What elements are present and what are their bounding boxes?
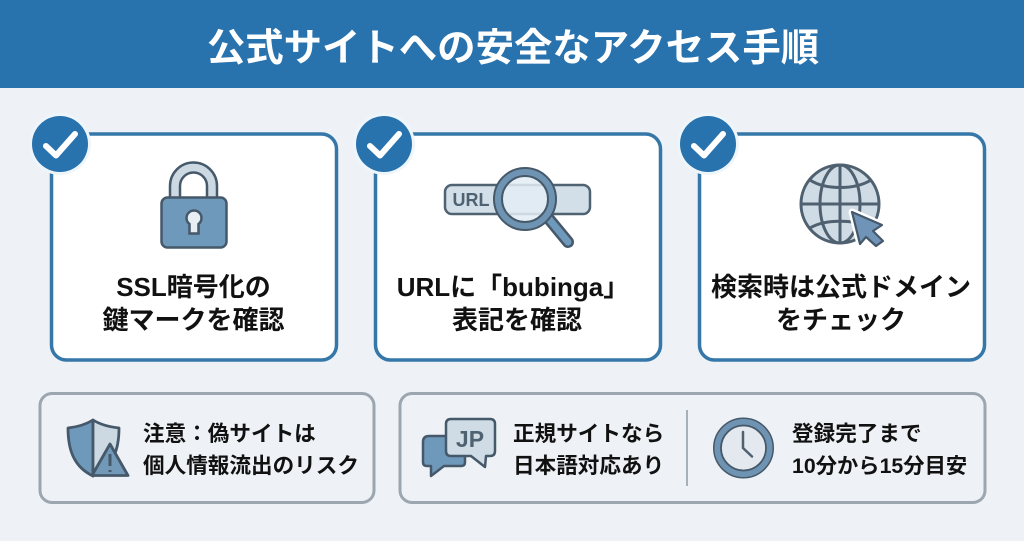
panel: language and time notes [400, 394, 985, 502]
title: 公式サイトへの安全なアクセス手順 [207, 27, 819, 70]
icon: JP speech bubbles: JP [456, 426, 484, 452]
divider [686, 410, 688, 486]
step label [397, 272, 629, 335]
icon: URL bar with magnifier: URL [452, 190, 490, 210]
language text [513, 421, 664, 478]
icon: globe with cursor [801, 165, 883, 246]
icon: JP speech bubbles [423, 419, 495, 476]
icon: check badge [29, 113, 91, 175]
panel: SSL lock step [29, 113, 336, 360]
panel: official domain step [677, 113, 984, 360]
panel: URL check step [353, 113, 660, 360]
step label: 鍵マークを確認 [102, 305, 285, 335]
icon: shield with warning triangle [68, 420, 128, 476]
panel: warning note [40, 394, 374, 502]
time text: 登録完了まで [792, 421, 922, 446]
step label: SSL暗号化の [116, 272, 271, 302]
warning text [143, 421, 359, 478]
time text [792, 421, 967, 478]
language text: 日本語対応あり [513, 453, 664, 478]
step label: URLに「bubinga」 [397, 272, 629, 302]
warning text: 注意：偽サイトは [143, 421, 316, 446]
time text: 10分から15分目安 [792, 454, 967, 478]
icon: URL bar with magnifier [445, 172, 590, 242]
step label: をチェック [776, 305, 906, 335]
warning text: 個人情報流出のリスク [143, 453, 359, 478]
icon: clock [714, 418, 773, 478]
step label [102, 272, 285, 335]
language text: 正規サイトなら [513, 421, 664, 446]
header banner [0, 0, 1024, 88]
icon: padlock [162, 162, 226, 248]
icon: check badge [353, 113, 415, 175]
step label [711, 272, 971, 335]
icon: check badge [677, 113, 739, 175]
step label: 表記を確認 [452, 305, 582, 335]
step label: 検索時は公式ドメイン [711, 272, 971, 302]
